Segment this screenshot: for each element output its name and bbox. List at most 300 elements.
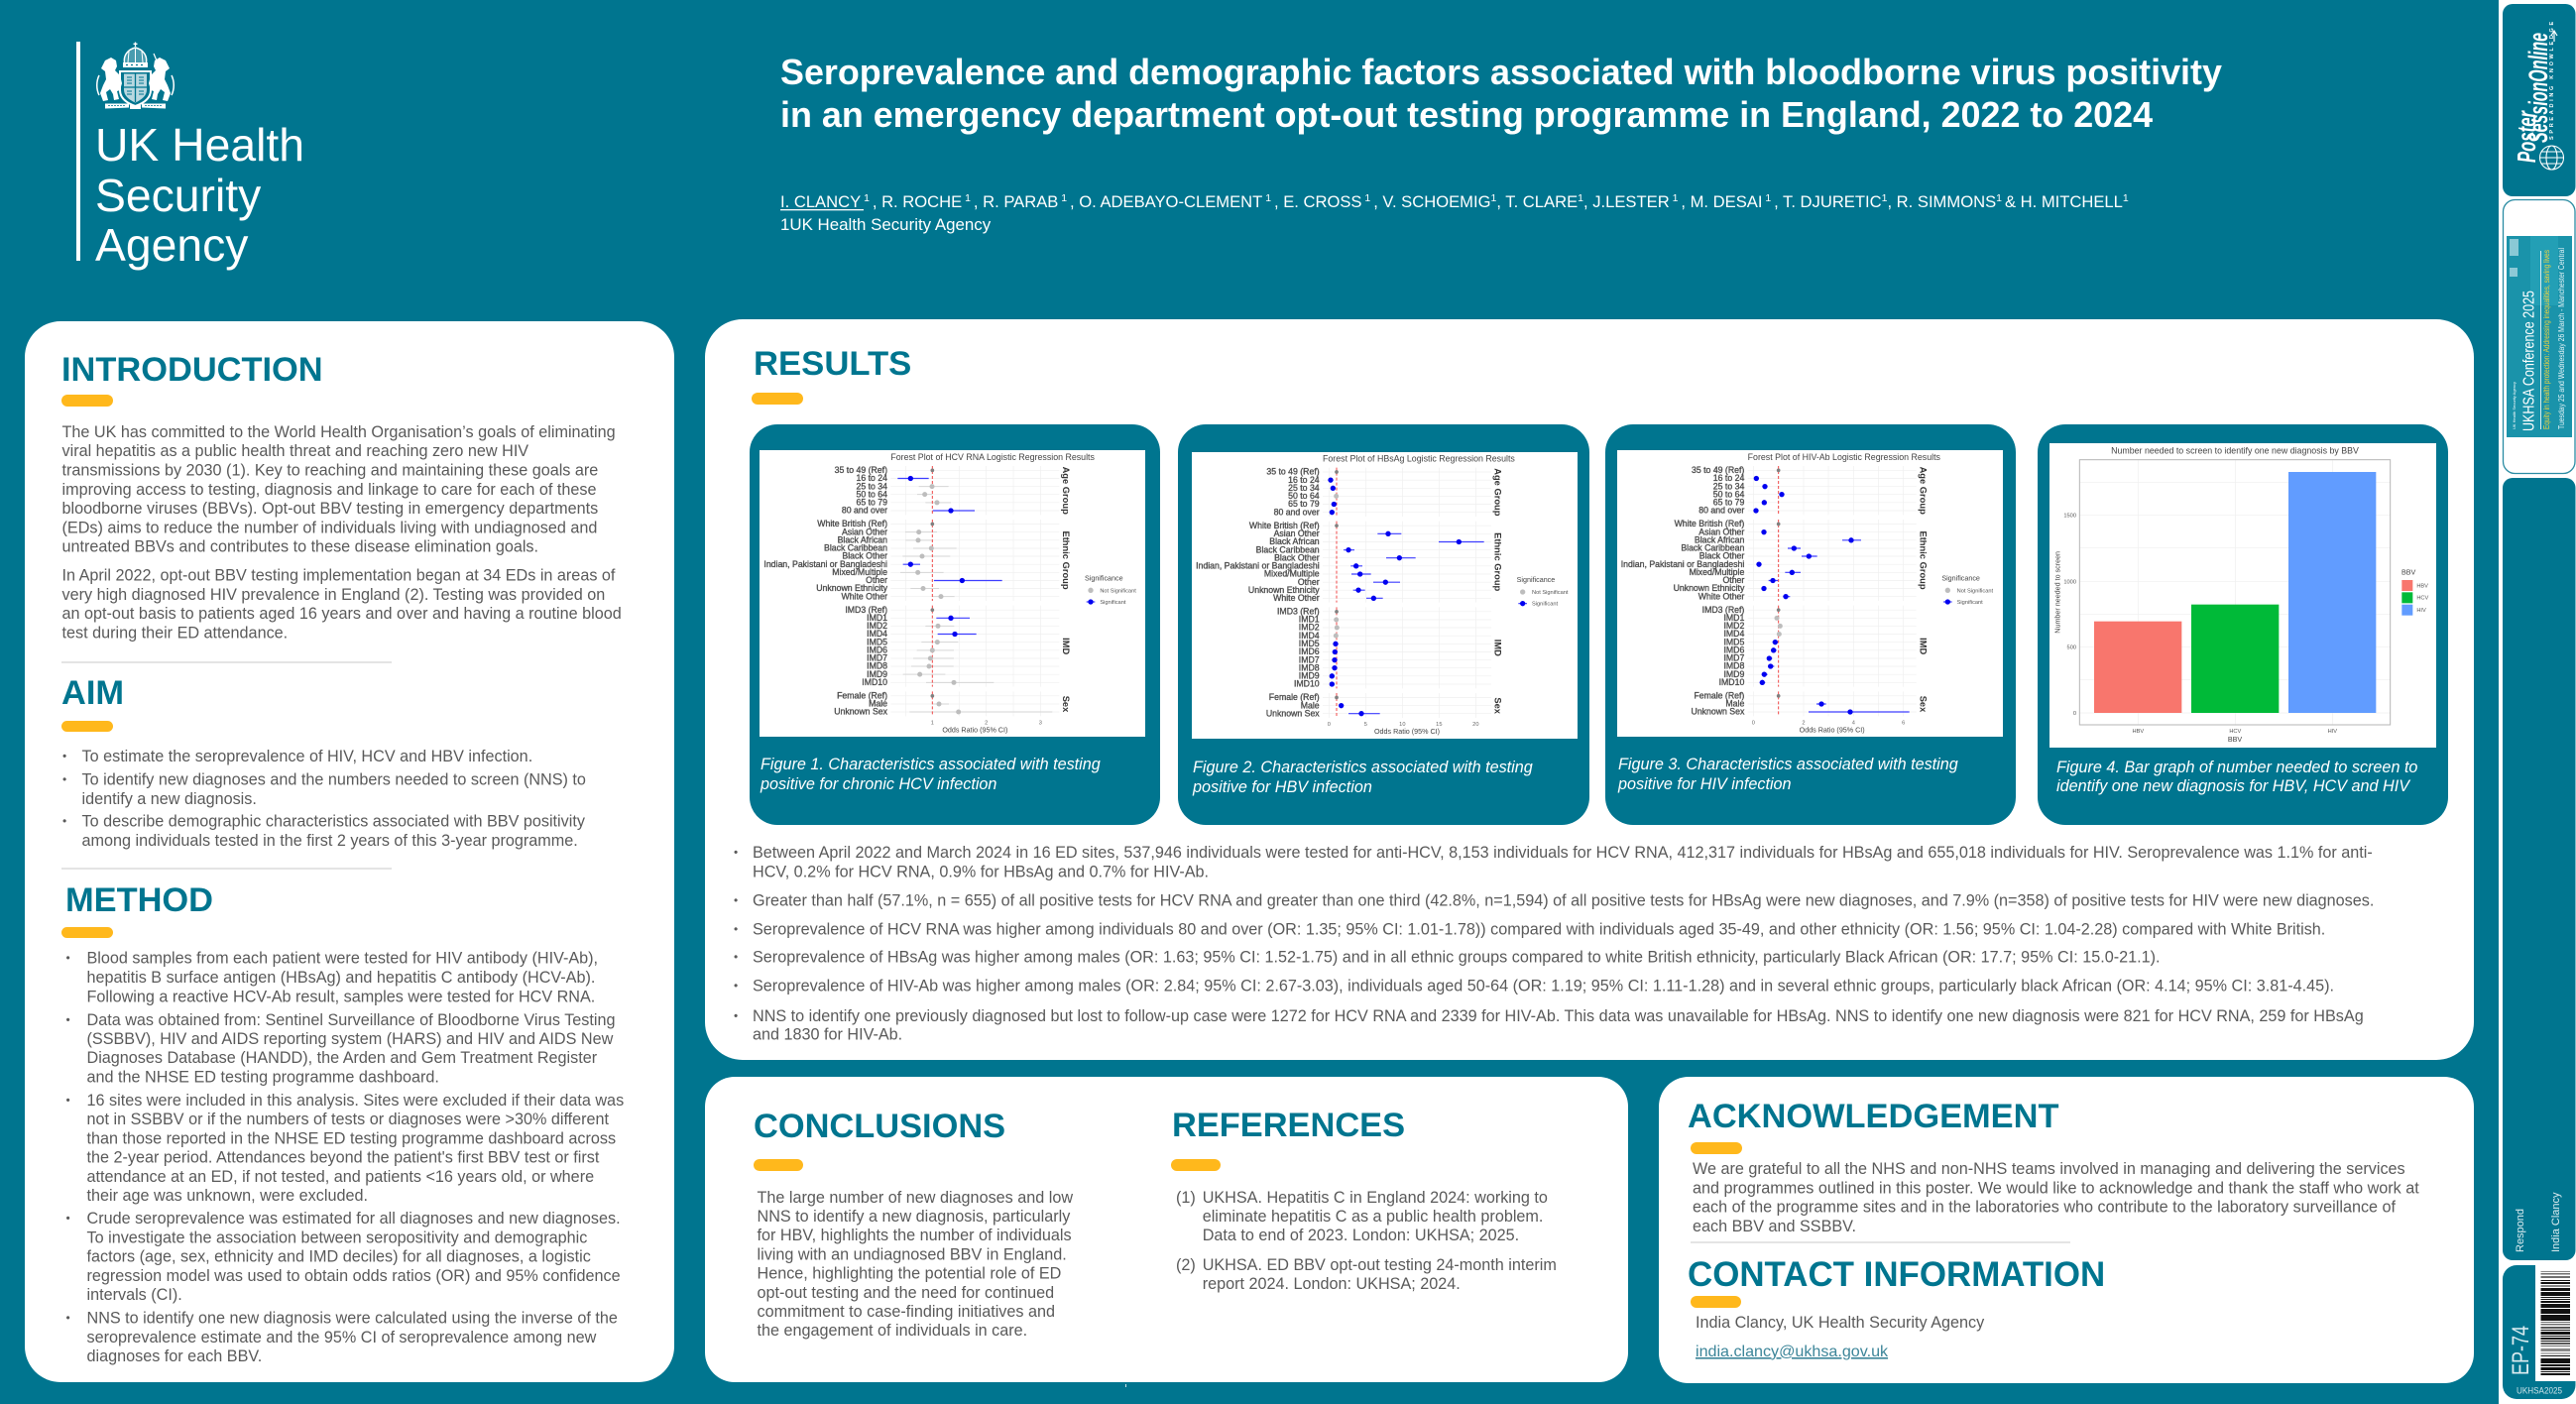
chart: HCV RNA forest plot: 16 to 24: [856, 473, 887, 483]
chart: HBsAg forest plot: Male: [1301, 700, 1320, 710]
text: conclusions body: living with an undiagnosed BBV in England.: [758, 1245, 1067, 1263]
authors: 1: [1058, 192, 1070, 204]
chart: HCV RNA forest plot: IMD2: [867, 621, 887, 631]
chart: HCV RNA forest plot: Significance: [1085, 574, 1123, 582]
chart: HCV RNA forest plot: 35 to 49 (Ref): [835, 465, 887, 475]
text: introduction body: improving access to testing, diagnosis and linkage to care for each of these: [61, 481, 597, 499]
chart: HIV-Ab forest plot: 25 to 34: [1713, 481, 1744, 491]
text: acknowledgement body: and programmes outlined in this poster. We would like to acknowledge and thank the staff who work at: [1693, 1179, 2419, 1197]
chart: HIV-Ab forest plot: Unknown Ethnicity: [1674, 583, 1745, 593]
authors: 1: [2123, 192, 2129, 204]
chart: HIV-Ab forest plot: Sex: [1918, 696, 1928, 713]
chart: HIV-Ab forest plot: Mixed/Multiple: [1690, 567, 1744, 577]
text: method bullets: •: [65, 1311, 70, 1325]
chart: HIV-Ab forest plot: Significance: [1941, 574, 1980, 582]
panel: results: [705, 319, 2474, 1060]
chart: HCV RNA forest plot: Not Significant: [1100, 588, 1136, 594]
chart: HBsAg forest plot: Age Group: [1493, 468, 1503, 517]
text: references list: Data to end of 2023. London: UKHSA; 2025.: [1203, 1227, 1519, 1244]
chart: HBsAg forest plot: IMD6: [1299, 646, 1320, 656]
accent bar: [1691, 1296, 1741, 1308]
chart: HCV RNA forest plot: 50 to 64: [856, 489, 887, 499]
authors: [780, 192, 2129, 234]
chart: HIV-Ab forest plot: 35 to 49 (Ref): [1692, 465, 1744, 475]
text: method bullets: attendance at an ED, if not tested, and patients <16 years old, or where: [87, 1168, 594, 1186]
chart: HBsAg forest plot: Unknown Sex: [1266, 708, 1320, 718]
chart: HCV RNA forest plot: Other: [866, 575, 887, 585]
chart: HBsAg forest plot: Black Other: [1274, 552, 1320, 562]
panel: acknowledgement and contact: [1659, 1077, 2474, 1383]
text: aim bullets: [62, 748, 586, 850]
caption: figure 4: Figure 4. Bar graph of number needed to screen to: [2056, 759, 2417, 776]
heading: conclusions: CONCLUSIONS: [754, 1108, 1005, 1145]
chart: HBsAg forest plot: Mixed/Multiple: [1264, 569, 1320, 579]
chart: HIV-Ab forest plot: IMD6: [1723, 644, 1744, 654]
chart: HCV RNA forest plot: Forest Plot of HCV RNA Logistic Regression Results: [890, 452, 1095, 462]
chart: HCV RNA forest plot: [763, 452, 1136, 734]
chart: HCV RNA forest plot: Female (Ref): [837, 690, 887, 700]
sidebar box: UKHSA conference banner: UKHSA Conference 2025: [2520, 291, 2538, 431]
chart: HBsAg forest plot: Significant: [1532, 602, 1559, 608]
chart: HBsAg forest plot: White Other: [1273, 593, 1320, 603]
caption: figure 4: [2056, 759, 2417, 795]
chart: HIV-Ab forest plot: 65 to 79: [1713, 497, 1744, 507]
text: method bullets: the 2-year period. Attendances beyond the patient's first BBV test or first: [87, 1149, 600, 1167]
chart: HIV-Ab forest plot: IMD1: [1723, 613, 1744, 623]
sidebar box: poster session online logo: SPREADING KNOWLEDGE: [2549, 19, 2555, 140]
bar: HCV: [2191, 605, 2279, 713]
text: introduction body: untreated BBVs and contributes to these disease elimination goals.: [61, 538, 538, 556]
accent bar: [754, 1159, 803, 1171]
text: method bullets: •: [65, 1012, 70, 1026]
chart: HIV-Ab forest plot: Other: [1723, 575, 1744, 585]
text: method bullets: To investigate the association between seropositivity and demographic: [87, 1228, 587, 1246]
text: method bullets: [65, 950, 624, 1365]
sidebar box: UKHSA conference banner: Tuesday 25 and Wednesday 26 March - Manchester Central: [2557, 248, 2566, 429]
sidebar box: respond and presenter: India Clancy: [2550, 1192, 2562, 1252]
caption: figure 3: [1617, 756, 1958, 793]
chart: HCV RNA forest plot: White Other: [841, 591, 887, 601]
chart: HCV RNA forest plot: IMD1: [867, 613, 887, 623]
text: acknowledgement body: [1693, 1160, 2419, 1235]
text: method bullets: •: [65, 1093, 70, 1107]
chart: HIV-Ab forest plot: 16 to 24: [1713, 473, 1744, 483]
chart: HBsAg forest plot: Other: [1298, 577, 1320, 587]
text: method bullets: diagnoses for each BBV.: [87, 1347, 262, 1365]
authors: 1: [1670, 192, 1681, 204]
logo: UK Health Security Agency: Agency: [95, 219, 249, 271]
chart: HBsAg forest plot: Sex: [1493, 697, 1503, 715]
legend: [2401, 569, 2428, 616]
text: references list: [1176, 1189, 1557, 1293]
authors: , R. SIMMONS: [1887, 192, 1996, 211]
title: in an emergency department opt-out testing programme in England, 2022 to 2024: [780, 95, 2153, 135]
chart: HBsAg forest plot: Odds Ratio (95% CI): [1374, 728, 1440, 736]
chart: HIV-Ab forest plot: IMD5: [1723, 637, 1744, 646]
chart: HBsAg forest plot: 25 to 34: [1288, 483, 1320, 493]
authors: 1: [1578, 192, 1583, 204]
caption: figure 4: identify one new diagnosis for HBV, HCV and HIV: [2056, 777, 2411, 795]
sidebar box: UKHSA conference banner: Equity in health protection: Addressing inequalities, saving lives: [2542, 250, 2551, 429]
chart: HBsAg forest plot: IMD8: [1299, 662, 1320, 672]
chart: HCV RNA forest plot: IMD4: [867, 629, 887, 639]
text: aim bullets: To estimate the seroprevalence of HIV, HCV and HBV infection.: [81, 748, 532, 765]
text: introduction body: In April 2022, opt-out BBV testing implementation began at 34 EDs in areas of: [61, 567, 616, 585]
panel: conclusions and references: [705, 1077, 1628, 1382]
chart: HBsAg forest plot: 0: [1328, 722, 1331, 728]
chart: HIV-Ab forest plot: Unknown Sex: [1692, 707, 1745, 717]
text: method bullets: factors (age, sex, ethnicity and IMD deciles) for all diagnoses, a logistic: [87, 1248, 591, 1266]
text: introduction body: an opt-out basis to patients aged 16 years and over and having a routine blood: [61, 605, 622, 623]
bar: HIV: [2288, 472, 2376, 713]
legend: HIV: [2416, 608, 2426, 614]
text: method bullets: Following a reactive HCV-Ab result, samples were tested for HCV RNA.: [87, 988, 595, 1005]
text: aim bullets: •: [62, 814, 66, 828]
card: figure 2: [1178, 424, 1589, 825]
logo: UK Health Security Agency: Security: [95, 170, 262, 221]
text: aim bullets: among individuals tested in the first 2 years of this 3-year programme.: [81, 832, 578, 850]
barcode: [2540, 1271, 2570, 1375]
chart: HIV-Ab forest plot: White Other: [1698, 591, 1744, 601]
chart: NNS bar graph: 0: [2073, 711, 2076, 717]
chart: HBsAg forest plot: Unknown Ethnicity: [1248, 585, 1320, 595]
text: introduction body: test during their ED attendance.: [61, 624, 288, 642]
caption: figure 1: [760, 756, 1101, 793]
chart: HBsAg forest plot: 50 to 64: [1288, 491, 1320, 501]
chart: HIV-Ab forest plot: Male: [1725, 699, 1744, 709]
chart: HCV RNA forest plot: Sex: [1061, 696, 1071, 713]
authors: 1: [962, 192, 974, 204]
icon: royal crest: [97, 42, 174, 109]
chart: HCV RNA forest plot: IMD: [1061, 638, 1071, 654]
authors: , V. SCHOEMIG: [1373, 192, 1491, 211]
card: figure 1: [750, 424, 1160, 825]
chart: HCV RNA forest plot: Unknown Ethnicity: [816, 583, 888, 593]
accent bar: [61, 721, 113, 732]
chart: HCV RNA forest plot: Black Other: [842, 551, 887, 561]
chart: HIV-Ab forest plot: IMD7: [1723, 653, 1744, 663]
authors: 1: [861, 192, 873, 204]
chart: HCV RNA forest plot: Asian Other: [842, 526, 887, 536]
text: conclusions body: The large number of new diagnoses and low: [758, 1189, 1073, 1207]
caption: figure 2: positive for HBV infection: [1192, 778, 1372, 796]
authors: , T. CLARE: [1496, 192, 1578, 211]
authors: , T. DJURETIC: [1774, 192, 1882, 211]
chart: HCV RNA forest plot: Indian, Pakistani or Bangladeshi: [763, 559, 887, 569]
chart: HBsAg forest plot: 15: [1436, 722, 1442, 728]
accent bar: [752, 393, 803, 405]
chart: HBsAg forest plot: IMD2: [1299, 623, 1320, 633]
chart: HBsAg forest plot: Significance: [1517, 576, 1555, 584]
chart: NNS bar graph: Number needed to screen to identify one new diagnosis by BBV: [2111, 446, 2359, 456]
chart: HCV RNA forest plot: Mixed/Multiple: [832, 567, 887, 577]
chart: HIV-Ab forest plot: [1621, 452, 1994, 734]
bar: HBV: [2094, 622, 2181, 713]
chart: HIV-Ab forest plot: IMD9: [1723, 669, 1744, 679]
chart: HBsAg forest plot: Black African: [1269, 536, 1320, 546]
heading: introduction: INTRODUCTION: [61, 351, 323, 389]
chart: HBsAg forest plot: IMD: [1493, 640, 1503, 656]
text: conclusions body: Hence, highlighting the potential role of ED: [758, 1265, 1061, 1283]
text: method bullets: Crude seroprevalence was estimated for all diagnoses and new diagnoses.: [87, 1210, 621, 1228]
chart: HBsAg forest plot: Indian, Pakistani or Bangladeshi: [1196, 561, 1320, 571]
chart: HIV-Ab forest plot: IMD10: [1719, 677, 1744, 687]
text: method bullets: NNS to identify one new diagnosis were calculated using the inverse of the: [87, 1309, 618, 1327]
chart: HCV RNA forest plot: Age Group: [1061, 467, 1071, 515]
text: references list: report 2024. London: UKHSA; 2024.: [1203, 1275, 1461, 1293]
chart: HBsAg forest plot: [1196, 454, 1569, 736]
text: results bullets: and 1830 for HIV-Ab.: [753, 1026, 902, 1044]
text: results bullets: •: [734, 1009, 738, 1023]
chart: HCV RNA forest plot: White British (Ref): [817, 519, 887, 528]
chart: HIV-Ab forest plot: IMD8: [1723, 661, 1744, 671]
chart: HBsAg forest plot: 80 and over: [1274, 507, 1320, 517]
accent bar: [1171, 1159, 1221, 1171]
authors: , R. PARAB: [974, 192, 1058, 211]
heading: acknowledgement: ACKNOWLEDGEMENT: [1688, 1098, 2058, 1135]
chart: NNS bar graph: HIV: [2328, 729, 2337, 735]
authors: 1: [1762, 192, 1774, 204]
chart: HBsAg forest plot: IMD5: [1299, 639, 1320, 648]
logo: UK Health Security Agency: UK Health: [95, 119, 304, 171]
chart: HIV-Ab forest plot: 4: [1852, 720, 1855, 726]
chart: HBsAg forest plot: IMD10: [1294, 679, 1320, 689]
sidebar box: poster session online logo: Poster: [2512, 110, 2541, 163]
chart: HBsAg forest plot: 20: [1472, 722, 1478, 728]
text: results bullets: Seroprevalence of HBsAg was higher among males (OR: 1.63; 95% CI: 1.52-1.75) and in all ethnic groups compared to white British ethnicity, particularly Black African (OR: 17.7; 95% CI: 15.0-21.1).: [753, 949, 2160, 967]
text: method bullets: (SSBBV), HIV and AIDS reporting system (HARS) and HIV and AIDS New: [87, 1030, 614, 1048]
chart: HBsAg forest plot: White British (Ref): [1249, 521, 1320, 530]
chart: NNS bar graph: 500: [2067, 645, 2076, 651]
chart: HIV-Ab forest plot: 2: [1802, 720, 1806, 726]
caption: figure 3: positive for HIV infection: [1617, 775, 1792, 793]
authors: 1: [1491, 192, 1497, 204]
card: figure 4: [2038, 424, 2448, 825]
chart: HBsAg forest plot: 5: [1364, 722, 1367, 728]
chart: HBsAg forest plot: IMD1: [1299, 615, 1320, 625]
text: contact details: india.clancy@ukhsa.gov.uk: [1696, 1343, 1889, 1360]
text: conclusions body: opt-out testing and the need for continued: [758, 1284, 1054, 1302]
text: method bullets: 16 sites were included in this analysis. Sites were excluded if their data was: [87, 1092, 624, 1110]
authors: , J.LESTER: [1583, 192, 1670, 211]
authors: , M. DESAI: [1681, 192, 1762, 211]
chart: HIV-Ab forest plot: White British (Ref): [1675, 519, 1744, 528]
chart: HIV-Ab forest plot: 80 and over: [1698, 506, 1744, 516]
chart: HBsAg forest plot: Asian Other: [1274, 528, 1320, 538]
text: introduction body: [61, 423, 622, 642]
chart: NNS bar graph: BBV: [2228, 736, 2242, 744]
authors: , O. ADEBAYO-CLEMENT: [1070, 192, 1262, 211]
chart: HIV-Ab forest plot: Indian, Pakistani or Bangladeshi: [1621, 559, 1744, 569]
text: results bullets: HCV, 0.2% for HCV RNA, 0.9% for HBsAg and 0.7% for HIV-Ab.: [753, 864, 1209, 881]
chart: HCV RNA forest plot: Black African: [838, 534, 887, 544]
chart: HCV RNA forest plot: 65 to 79: [856, 497, 887, 507]
chart: HIV-Ab forest plot: IMD2: [1723, 621, 1744, 631]
chart: HIV-Ab forest plot: IMD: [1918, 638, 1928, 654]
chart: HCV RNA forest plot: Unknown Sex: [834, 707, 888, 717]
sidebar box: UKHSA conference banner: UK Health Security Agency: [2512, 382, 2517, 429]
chart: HBsAg forest plot: Female (Ref): [1269, 692, 1320, 702]
heading: results: RESULTS: [754, 345, 911, 383]
text: method bullets: not in SSBBV or if the numbers of tests or diagnoses were >30% different: [87, 1111, 610, 1128]
text: conclusions body: for HBV, highlights the number of individuals: [758, 1227, 1072, 1244]
chart: NNS bar graph: HCV: [2229, 729, 2242, 735]
chart: HBsAg forest plot: Forest Plot of HBsAg Logistic Regression Results: [1323, 454, 1515, 464]
title: Seroprevalence and demographic factors associated with bloodborne virus positivity: [780, 53, 2222, 92]
chart: HIV-Ab forest plot: Ethnic Group: [1918, 530, 1928, 590]
chart: HIV-Ab forest plot: 0: [1752, 720, 1755, 726]
text: method bullets: Data was obtained from: Sentinel Surveillance of Bloodborne Virus Testing: [87, 1011, 616, 1029]
chart: HCV RNA forest plot: 25 to 34: [856, 481, 887, 491]
chart: HBsAg forest plot: IMD7: [1299, 654, 1320, 664]
chart: HBsAg forest plot: Not Significant: [1532, 590, 1569, 596]
text: results bullets: Greater than half (57.1%, n = 655) of all positive tests for HCV RNA and greater than one third (42.8%, n=1,594) of all positive tests for HBsAg were new diagnoses, and 7.9% (n=358) of positive tests for HIV were new diagnoses.: [753, 891, 2374, 909]
heading: references: REFERENCES: [1172, 1107, 1405, 1144]
chart: HBsAg forest plot: 35 to 49 (Ref): [1266, 467, 1320, 477]
text: method bullets: Blood samples from each patient were tested for HIV antibody (HIV-Ab),: [87, 950, 598, 968]
chart: HIV-Ab forest plot: Black Caribbean: [1681, 543, 1744, 553]
text: acknowledgement body: each BBV and SSBBV.: [1693, 1218, 1856, 1235]
authors: 1: [1996, 192, 2005, 204]
text: aim bullets: •: [62, 750, 66, 763]
sidebar box: poster session online logo: [2503, 4, 2576, 196]
chart: HCV RNA forest plot: 80 and over: [842, 506, 887, 516]
authors: 1: [1882, 192, 1888, 204]
caption: figure 2: [1192, 759, 1533, 796]
text: method bullets: their age was unknown, were excluded.: [87, 1187, 368, 1205]
chart: HBsAg forest plot: IMD9: [1299, 671, 1320, 681]
chart: HIV-Ab forest plot: Black African: [1695, 534, 1744, 544]
chart: HBsAg forest plot: 10: [1399, 722, 1405, 728]
text: introduction body: transmissions by 2030 (1). Key to reaching and maintaining these goals are: [61, 462, 598, 480]
chart: NNS bar graph: 1000: [2063, 579, 2076, 585]
text: results bullets: Between April 2022 and March 2024 in 16 ED sites, 537,946 individuals were tested for anti-HCV, 8,153 individuals for HCV RNA, 412,317 individuals for HBsAg and 655,018 individuals for HIV. Seroprevalence was 1.1% for anti-: [753, 844, 2373, 862]
heading: method: METHOD: [65, 881, 213, 919]
chart: HCV RNA forest plot: IMD8: [867, 661, 887, 671]
text: acknowledgement body: each of the programme sites and in the laboratories who contribute to the laboratory surveillance of: [1693, 1199, 2397, 1217]
chart: HCV RNA forest plot: Male: [869, 699, 887, 709]
text: aim bullets: identify a new diagnosis.: [81, 790, 257, 808]
sidebar: [2499, 0, 2576, 1404]
text: aim bullets: To identify new diagnoses and the numbers needed to screen (NNS) to: [81, 771, 586, 789]
accent bar: [61, 927, 113, 938]
sidebar box: poster code and barcode: EP-74: [2508, 1326, 2534, 1375]
text: results bullets: Seroprevalence of HIV-Ab was higher among males (OR: 2.84; 95% CI: 2.67-3.03), individuals aged 50-64 (OR: 1.19; 95% CI: 1.11-1.28) and in several ethnic groups, particularly black African (OR: 4.14; 95% CI: 3.81-4.45).: [753, 977, 2334, 994]
caption: figure 1: Figure 1. Characteristics associated with testing: [761, 756, 1101, 773]
text: references list: UKHSA. Hepatitis C in England 2024: working to: [1203, 1189, 1548, 1207]
chart: HIV-Ab forest plot: Asian Other: [1698, 526, 1744, 536]
authors: , R. ROCHE: [873, 192, 962, 211]
text: results bullets: •: [734, 950, 738, 964]
chart: HBsAg forest plot: Black Caribbean: [1256, 544, 1320, 554]
chart: HIV-Ab forest plot: Odds Ratio (95% CI): [1800, 726, 1865, 734]
authors: & H. MITCHELL: [2005, 192, 2123, 211]
chart: HIV-Ab forest plot: IMD4: [1723, 629, 1744, 639]
caption: figure 1: positive for chronic HCV infection: [760, 775, 996, 793]
caption: figure 2: Figure 2. Characteristics associated with testing: [1193, 759, 1533, 776]
chart: HIV-Ab forest plot: Significant: [1957, 600, 1983, 606]
chart: NNS bar graph: Number needed to screen: [2053, 551, 2061, 634]
authors: , E. CROSS: [1274, 192, 1362, 211]
sidebar box: respond and presenter: Respond: [2515, 1209, 2526, 1252]
chart: HIV-Ab forest plot: 6: [1902, 720, 1905, 726]
text: method bullets: Diagnoses Database (HANDD), the Arden and Gem Treatment Register: [87, 1049, 598, 1067]
accent bar: [1691, 1142, 1742, 1154]
authors: 1UK Health Security Agency: [780, 215, 992, 234]
text: results bullets: NNS to identify one previously diagnosed but lost to follow-up case were 1272 for HCV RNA and 2339 for HIV-Ab. This data was unavailable for HBsAg. NNS to identify one new diagnosis were 821 for HCV RNA, 259 for HBsAg: [753, 1007, 2364, 1025]
text: references list: (1): [1176, 1189, 1196, 1207]
text: introduction body: very high diagnosed HIV prevalence in England (2). Testing was provided on: [61, 586, 605, 604]
text: method bullets: •: [65, 1212, 70, 1226]
text: conclusions body: [758, 1189, 1073, 1340]
chart: HIV-Ab forest plot: Forest Plot of HIV-Ab Logistic Regression Results: [1748, 452, 1941, 462]
text: method bullets: than those reported in the NHSE ED testing programme dashboard across: [87, 1129, 616, 1147]
chart: HIV-Ab forest plot: Female (Ref): [1694, 690, 1744, 700]
text: method bullets: intervals (CI).: [87, 1286, 182, 1304]
text: acknowledgement body: We are grateful to all the NHS and non-NHS teams involved in managing and delivering the services: [1693, 1160, 2405, 1178]
legend: HBV: [2416, 583, 2428, 589]
chart: HCV RNA forest plot: IMD10: [862, 677, 887, 687]
chart: NNS bar graph: HBV: [2133, 729, 2144, 735]
sidebar box: poster code and barcode: UKHSA2025: [2517, 1386, 2562, 1396]
chart: HCV RNA forest plot: 2: [985, 720, 988, 726]
chart: HCV RNA forest plot: IMD5: [867, 637, 887, 646]
text: introduction body: viral hepatitis as a public health threat and reaching zero new HIV: [61, 442, 528, 460]
heading: contact information: CONTACT INFORMATION: [1688, 1255, 2105, 1294]
authors: 1: [1262, 192, 1274, 204]
chart: HBsAg forest plot: 16 to 24: [1288, 475, 1320, 485]
chart: NNS bar graph: [2053, 446, 2428, 744]
panel: left column: [25, 321, 674, 1382]
chart: HCV RNA forest plot: 3: [1039, 720, 1042, 726]
text: results bullets: •: [734, 893, 738, 907]
chart: HBsAg forest plot: IMD3 (Ref): [1277, 607, 1320, 617]
chart: HCV RNA forest plot: IMD9: [867, 669, 887, 679]
text: results bullets: •: [734, 922, 738, 936]
text: introduction body: bloodborne viruses (BBVs). Opt-out BBV testing in emergency departments: [61, 500, 598, 518]
sidebar box: UKHSA conference banner: [2503, 200, 2575, 474]
text: contact details: India Clancy, UK Health Security Agency: [1696, 1314, 1985, 1332]
text: conclusions body: commitment to case-finding initiatives and: [758, 1303, 1055, 1321]
legend: BBV: [2401, 569, 2416, 577]
chart: HBsAg forest plot: IMD4: [1299, 631, 1320, 641]
text: method bullets: hepatitis B surface antigen (HBsAg) and hepatitis C antibody (HCV-Ab).: [87, 969, 595, 987]
heading: aim: AIM: [61, 674, 124, 712]
text: results bullets: •: [734, 845, 738, 859]
sidebar box: respond and presenter: [2503, 478, 2576, 1260]
card: figure 3: [1605, 424, 2016, 825]
chart: NNS bar graph: 1500: [2063, 514, 2076, 520]
text: results bullets: Seroprevalence of HCV RNA was higher among individuals 80 and over (OR: 1.35; 95% CI: 1.01-1.78)) compared with individuals aged 35-49, and other ethnicity (OR: 1.56; 95% CI: 1.04-2.28) compared with White British.: [753, 920, 2325, 938]
logo: UK Health Security Agency: [76, 42, 304, 271]
authors: 1: [1362, 192, 1373, 204]
chart: HBsAg forest plot: 65 to 79: [1288, 499, 1320, 509]
chart: HCV RNA forest plot: IMD7: [867, 653, 887, 663]
chart: HCV RNA forest plot: Ethnic Group: [1061, 530, 1071, 590]
legend: HCV: [2416, 596, 2428, 602]
text: method bullets: seroprevalence estimate and the 95% CI of seroprevalence among new: [87, 1329, 597, 1346]
chart: HCV RNA forest plot: 1: [931, 720, 934, 726]
text: results bullets: •: [734, 979, 738, 993]
text: references list: (2): [1176, 1256, 1196, 1274]
chart: HCV RNA forest plot: IMD3 (Ref): [845, 605, 887, 615]
text: references list: UKHSA. ED BBV opt-out testing 24-month interim: [1203, 1256, 1557, 1274]
chart: HIV-Ab forest plot: Black Other: [1699, 551, 1744, 561]
text: introduction body: The UK has committed to the World Health Organisation’s goals of eliminating: [61, 423, 616, 441]
text: method bullets: regression model was used to obtain odds ratios (OR) and 95% confidence: [87, 1267, 621, 1285]
chart: HIV-Ab forest plot: 50 to 64: [1713, 489, 1744, 499]
chart: HCV RNA forest plot: Odds Ratio (95% CI): [942, 726, 1007, 734]
